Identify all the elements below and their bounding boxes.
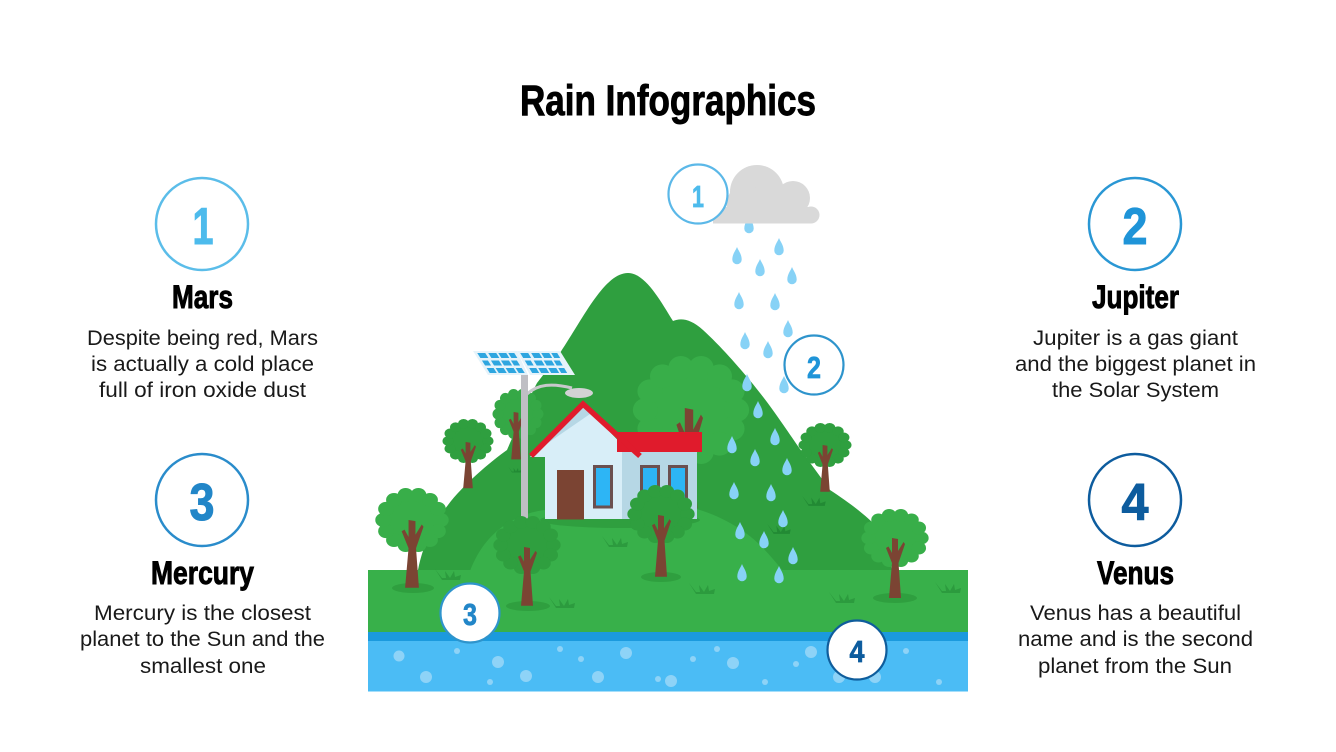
tree: large behind house — [633, 356, 749, 508]
solar panel right — [517, 351, 575, 375]
window 1 — [594, 466, 612, 507]
icon: number 1 badge — [156, 178, 248, 270]
front hill — [470, 508, 783, 571]
marker 4 on water — [828, 620, 886, 680]
tree: front left large — [375, 488, 449, 593]
text block: Mercury description — [80, 602, 325, 678]
gable shade — [536, 404, 590, 452]
tree: small right — [798, 423, 852, 492]
text block: Mars description — [87, 327, 318, 402]
text block: Mars description: full of iron oxide dust — [99, 379, 306, 402]
door — [557, 470, 584, 520]
heading: Venus: Venus — [1097, 555, 1174, 591]
icon: number 3 badge — [156, 454, 248, 546]
heading: Mars: Mars — [172, 279, 233, 315]
ground — [368, 570, 968, 632]
marker 2 on rain — [784, 336, 844, 394]
lamp post — [521, 375, 528, 519]
text block: Jupiter description: Jupiter is a gas giant — [1033, 327, 1238, 350]
water bubbles — [394, 646, 942, 687]
lamp arm — [527, 385, 572, 394]
text block: Jupiter description: the Solar System — [1052, 379, 1219, 402]
title: Rain Infographics — [520, 77, 816, 125]
house — [530, 404, 702, 528]
text block: Mercury description: Mercury is the closest — [94, 602, 311, 625]
heading: Jupiter: Jupiter — [1092, 279, 1179, 315]
gable roof — [531, 404, 640, 456]
marker 3 on ground: 3 — [463, 597, 477, 632]
rain drops — [727, 216, 798, 583]
panel: step 2 Jupiter — [1015, 178, 1256, 402]
grass tufts on mountain — [508, 467, 826, 534]
solar panel left — [473, 351, 528, 375]
panel: step 4 Venus — [1018, 454, 1253, 678]
icon: number 2 badge — [1089, 178, 1181, 270]
text block: Jupiter description — [1015, 327, 1256, 402]
icon: number 4 badge — [1089, 454, 1181, 546]
text block: Venus description: planet from the Sun — [1038, 655, 1232, 678]
lamp head — [565, 388, 593, 398]
marker 1 on cloud: 1 — [692, 179, 704, 214]
text block: Venus description — [1018, 602, 1253, 678]
marker 4 on water: 4 — [850, 634, 865, 669]
text block: Mars description: is actually a cold place — [91, 353, 314, 376]
tree: front centre-left — [493, 516, 561, 611]
icon: number 3 badge: 3 — [190, 474, 214, 532]
text block: Venus description: Venus has a beautiful — [1030, 602, 1241, 625]
street lamp with solar panels — [473, 351, 593, 519]
icon: number 1 badge: 1 — [192, 198, 214, 256]
tree: in front of house — [627, 485, 695, 582]
cloud — [713, 165, 820, 224]
icon: number 2 badge: 2 — [1122, 198, 1148, 256]
marker 3 on ground — [440, 584, 500, 642]
main wall — [530, 404, 632, 519]
tree: front right — [861, 509, 929, 603]
marker 2 on rain: 2 — [807, 350, 821, 385]
icon: number 4 badge: 4 — [1122, 474, 1149, 532]
river water — [368, 641, 968, 692]
side wing wall — [622, 452, 697, 519]
river bank — [368, 632, 968, 641]
panel: step 3 Mercury — [80, 454, 325, 678]
text block: Venus description: name and is the second — [1018, 628, 1253, 651]
heading: Mercury: Mercury — [151, 555, 254, 591]
side wing roof — [617, 432, 702, 452]
text block: Mercury description: planet to the Sun and the — [80, 628, 325, 651]
window 3 — [670, 466, 686, 506]
tree: behind lamp — [492, 389, 544, 459]
illustration: rain landscape — [368, 164, 968, 692]
text block: Mercury description: smallest one — [140, 655, 266, 678]
marker 1 on cloud — [668, 164, 728, 224]
window 2 — [642, 466, 658, 506]
back mountains — [418, 273, 892, 570]
tree: small left — [442, 419, 494, 488]
panel: step 1 Mars — [87, 178, 318, 402]
text block: Jupiter description: and the biggest planet in — [1015, 353, 1256, 376]
house shadow — [540, 512, 700, 528]
grass tufts on ground — [435, 536, 961, 608]
text block: Mars description: Despite being red, Mars — [87, 327, 318, 350]
